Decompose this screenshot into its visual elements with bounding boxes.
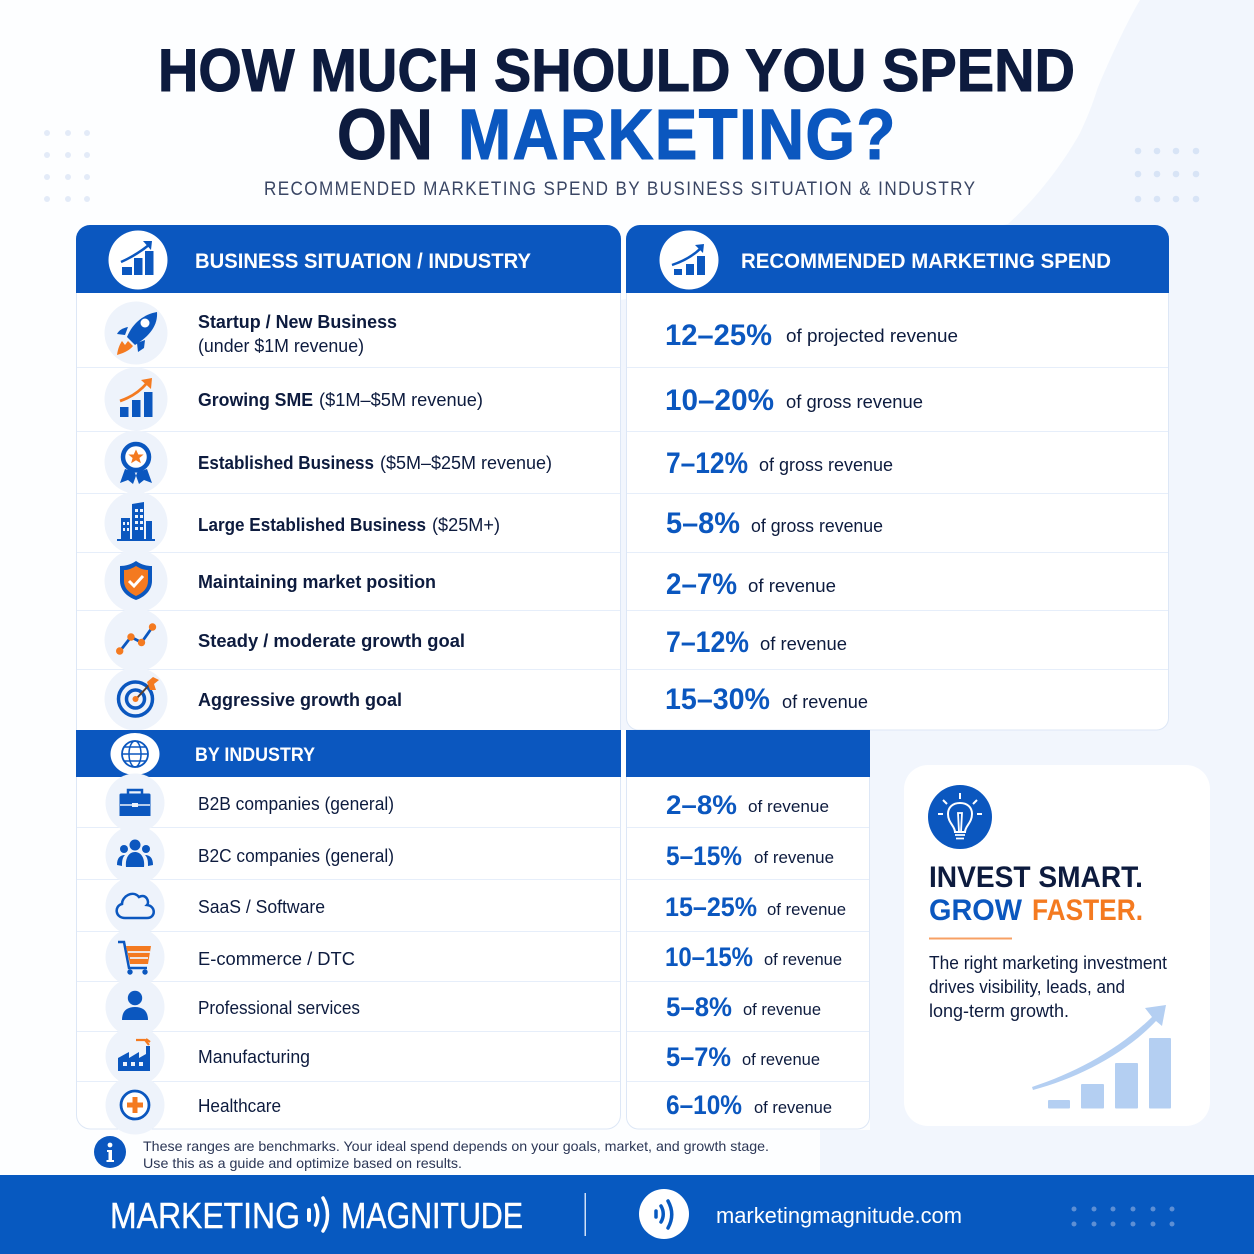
header: recommended spend <box>626 225 1169 293</box>
value: startup: of projected revenue <box>786 325 958 346</box>
value: manufacturing <box>666 1042 820 1072</box>
value: manufacturing: 5–7% <box>666 1042 731 1072</box>
callout card: invest smart: FASTER. <box>1032 894 1143 927</box>
row: established business: ($5M–$25M revenue) <box>380 452 552 473</box>
value: healthcare: 6–10% <box>666 1090 742 1120</box>
row: large established business <box>104 492 500 554</box>
header: business situation <box>76 225 621 293</box>
row: steady growth goal: Steady / moderate growth goal <box>198 630 465 651</box>
logo wordmark: MAGNITUDE <box>341 1195 523 1236</box>
value: B2B <box>666 790 829 820</box>
row: professional services: Professional services <box>198 998 360 1018</box>
value: maintaining <box>666 568 836 601</box>
value: SaaS <box>665 892 846 922</box>
logo wordmark: MARKETING <box>110 1195 300 1236</box>
row: B2C: B2C companies (general) <box>198 846 394 866</box>
row: manufacturing <box>106 1026 310 1086</box>
row: aggressive growth goal: Aggressive growth goal <box>198 689 402 710</box>
callout text: long-term growth. <box>929 1001 1069 1021</box>
value: established: of gross revenue <box>759 454 893 475</box>
value: growing SME: of gross revenue <box>786 391 923 412</box>
row: e-commerce <box>106 928 355 986</box>
value: steady: of revenue <box>760 633 847 654</box>
value: B2B: 2–8% <box>666 790 737 820</box>
value: e-commerce <box>665 942 842 972</box>
value: large established: of gross revenue <box>751 515 883 536</box>
row: SaaS: SaaS / Software <box>198 897 325 917</box>
band: by industry right <box>626 730 870 777</box>
value: aggressive <box>665 683 868 716</box>
value: B2C <box>666 841 834 871</box>
value: e-commerce: of revenue <box>764 950 842 969</box>
value: professional services: of revenue <box>743 1000 821 1019</box>
icon: light bulb <box>928 785 992 849</box>
value: SaaS: of revenue <box>767 900 846 919</box>
row: growing SME: Growing SME <box>198 389 313 410</box>
row: startup: Startup / New Business <box>198 311 397 332</box>
row: e-commerce: E-commerce / DTC <box>198 949 355 969</box>
title: ON <box>337 96 433 175</box>
footer: marketingmagnitude.com <box>716 1203 962 1228</box>
value: growing SME <box>665 384 923 417</box>
chart: rising bars and arrow <box>1032 1005 1171 1108</box>
panel: recommended spend column <box>626 225 1169 1129</box>
row: manufacturing: Manufacturing <box>198 1047 310 1067</box>
value: aggressive: of revenue <box>782 691 868 712</box>
note: benchmark disclaimer: These ranges are benchmarks. Your ideal spend depends on your goals, market, and growth stage. <box>143 1138 769 1154</box>
row: large established business: Large Established Business <box>198 514 426 535</box>
note: benchmark disclaimer: Use this as a guide and optimize based on results. <box>143 1155 462 1171</box>
row: growing SME: ($1M–$5M revenue) <box>319 389 483 410</box>
value: aggressive: 15–30% <box>665 683 770 716</box>
value: established <box>666 447 893 480</box>
value: B2C: of revenue <box>754 848 834 867</box>
row: professional services <box>106 978 360 1036</box>
value: professional services: 5–8% <box>666 992 732 1022</box>
row: large established business: ($25M+) <box>432 514 500 535</box>
note: benchmark disclaimer <box>94 1136 769 1171</box>
value: maintaining: of revenue <box>748 575 836 596</box>
row: established business: Established Business <box>198 452 374 473</box>
value: maintaining: 2–7% <box>666 568 737 601</box>
row: B2B: B2B companies (general) <box>198 794 394 814</box>
footer <box>0 1175 1254 1254</box>
callout card: invest smart <box>904 765 1210 1126</box>
header: recommended spend: RECOMMENDED MARKETING SPEND <box>741 250 1111 273</box>
row: SaaS <box>106 876 325 936</box>
row: B2B <box>106 774 394 832</box>
value: growing SME: 10–20% <box>665 384 774 417</box>
value: professional services <box>666 992 821 1022</box>
value: healthcare <box>666 1090 832 1120</box>
value: large established: 5–8% <box>666 507 740 540</box>
row: growing SME <box>104 368 483 430</box>
row: aggressive growth goal <box>104 668 402 730</box>
value: B2B: of revenue <box>748 797 829 816</box>
logo wordmark <box>110 1195 523 1236</box>
callout text: The right marketing investment <box>929 953 1167 973</box>
row: startup: (under $1M revenue) <box>198 335 364 356</box>
callout text: drives visibility, leads, and <box>929 977 1125 997</box>
value: e-commerce: 10–15% <box>665 942 753 972</box>
row: established business <box>104 430 552 494</box>
panel: business situation column <box>76 225 621 1134</box>
band: by industry <box>76 730 621 777</box>
row: healthcare: Healthcare <box>198 1096 281 1116</box>
title: HOW MUCH SHOULD YOU SPEND <box>158 38 1075 104</box>
value: startup <box>665 319 958 352</box>
title: MARKETING? <box>458 96 895 175</box>
subtitle: RECOMMENDED MARKETING SPEND BY BUSINESS SITUATION & INDUSTRY <box>264 178 975 199</box>
value: SaaS: 15–25% <box>665 892 757 922</box>
callout text <box>929 953 1167 1021</box>
row: startup <box>104 302 397 364</box>
value: large established <box>666 507 883 540</box>
value: manufacturing: of revenue <box>742 1050 820 1069</box>
callout card: invest smart: GROW <box>929 894 1023 927</box>
value: startup: 12–25% <box>665 319 772 352</box>
value: steady: 7–12% <box>666 626 749 659</box>
value: healthcare: of revenue <box>754 1098 832 1117</box>
callout card: invest smart: INVEST SMART. <box>929 861 1143 894</box>
value: B2C: 5–15% <box>666 841 742 871</box>
value: steady <box>666 626 847 659</box>
row: maintaining market position: Maintaining market position <box>198 571 436 592</box>
row: steady growth goal <box>104 608 465 672</box>
row: maintaining market position <box>104 550 436 612</box>
title <box>158 38 1075 175</box>
row: B2C <box>106 826 394 884</box>
header: business situation: BUSINESS SITUATION / INDUSTRY <box>195 250 531 273</box>
row: healthcare <box>106 1076 281 1134</box>
band: by industry: BY INDUSTRY <box>195 745 315 766</box>
logo mark <box>639 1189 689 1239</box>
value: established: 7–12% <box>666 447 748 480</box>
